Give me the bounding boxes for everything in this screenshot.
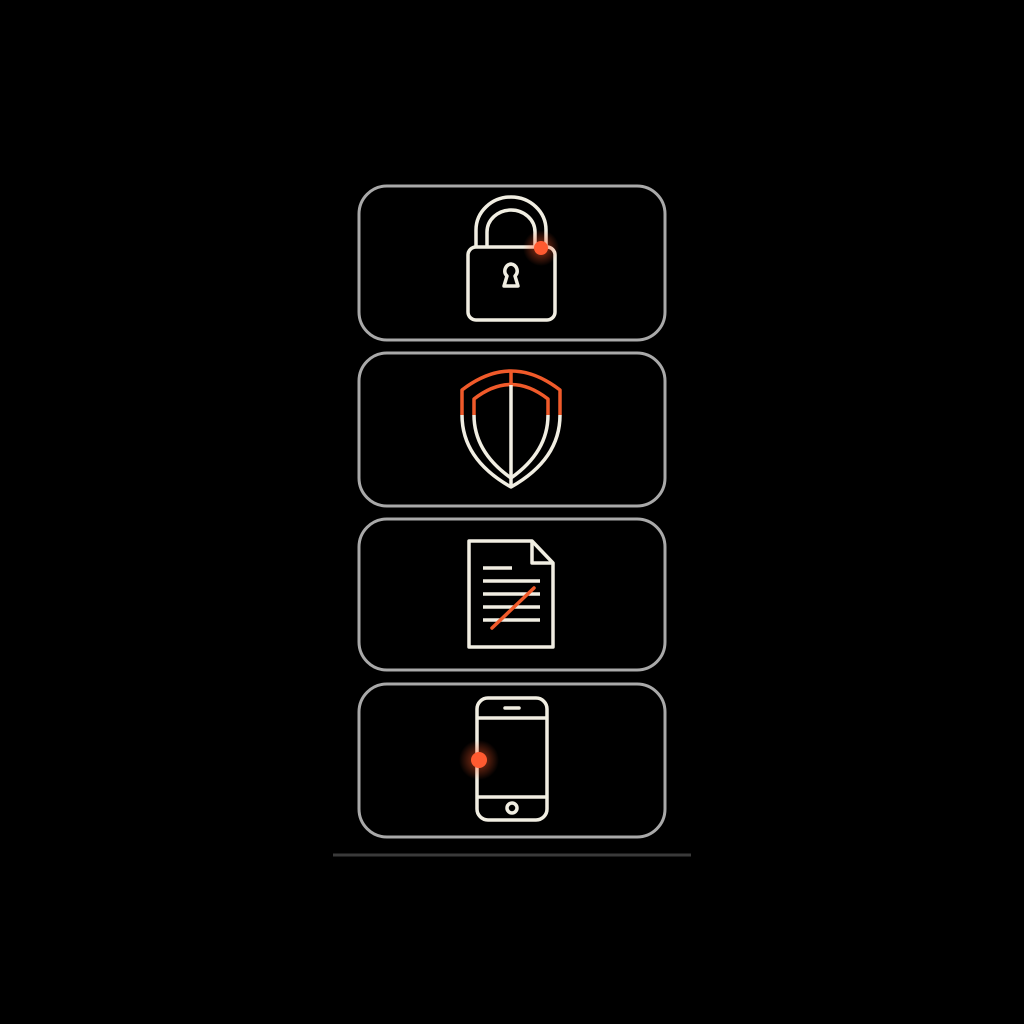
icon: document	[469, 541, 553, 647]
panel: shield	[359, 353, 665, 506]
panel: phone	[359, 684, 665, 837]
panel: document	[359, 519, 665, 670]
icon: phone	[459, 698, 547, 820]
panel: lock	[359, 186, 665, 340]
icon: shield	[462, 371, 560, 487]
icon: padlock	[468, 197, 559, 320]
